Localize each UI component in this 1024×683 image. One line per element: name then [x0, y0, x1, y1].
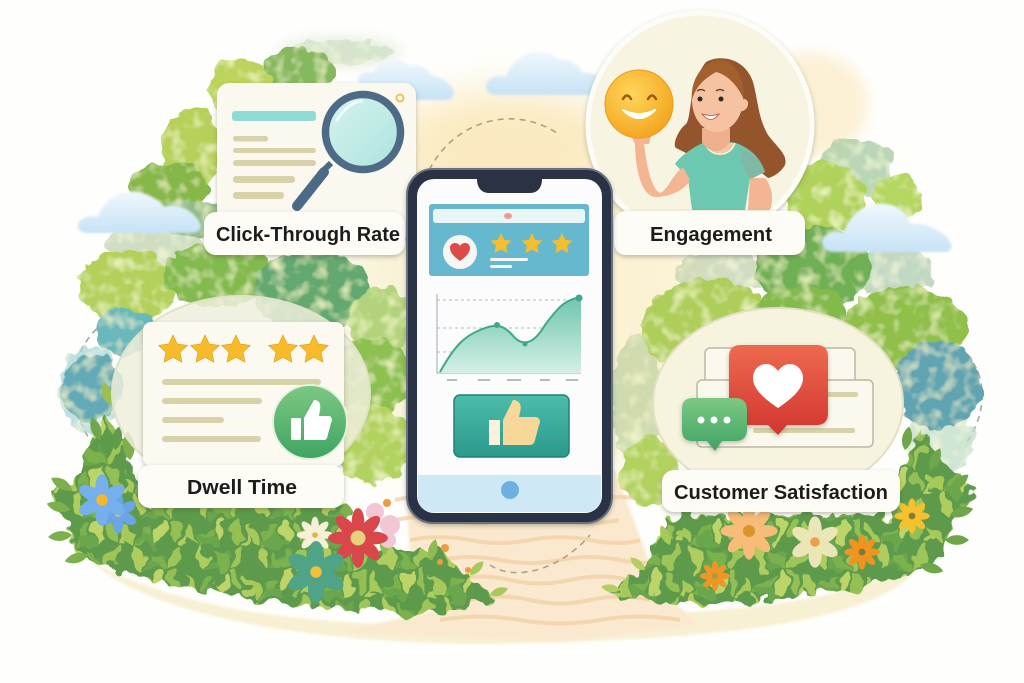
- sprigs: orange: [383, 499, 471, 573]
- foliage: pale background trees: [60, 40, 974, 474]
- bottom bar: [418, 475, 601, 512]
- area chart: [437, 294, 582, 380]
- flower: red: [328, 508, 388, 568]
- card lines: [753, 392, 858, 433]
- stacked cards: [697, 348, 873, 447]
- clouds: [78, 52, 952, 252]
- path with wavy stripes: [340, 470, 700, 642]
- label: engagement: Engagement: [650, 224, 772, 246]
- rating stars: [159, 335, 328, 362]
- bubble backdrop: [653, 308, 903, 498]
- foliage: right trees: [620, 162, 981, 506]
- card: search page: [217, 83, 416, 238]
- phone screen: [417, 179, 602, 513]
- flower: cream: [789, 516, 841, 568]
- label: click-through rate: Click-Through Rate: [216, 224, 400, 246]
- illustration: woman: [631, 58, 786, 210]
- panel: customer satisfaction: [653, 308, 903, 512]
- dashed orbit lines: [74, 119, 982, 573]
- foreground plants: right: [600, 426, 975, 606]
- review banner: [429, 204, 589, 276]
- flower: peach: [720, 502, 778, 560]
- foreground plants: left: [46, 381, 509, 616]
- thumbs up button: [454, 395, 569, 457]
- label: customer satisfaction: [662, 470, 900, 512]
- icon: magnifying glass: [297, 94, 404, 206]
- flowers: [76, 474, 930, 603]
- phone body: [407, 169, 612, 523]
- phone: [407, 169, 612, 523]
- flower: blue small: [98, 493, 138, 533]
- label: engagement: [614, 211, 805, 255]
- panel: dwell time: [112, 296, 370, 508]
- flower: orange: [844, 534, 880, 570]
- review lines: [162, 379, 321, 442]
- flower: pink: [366, 503, 400, 548]
- label: dwell time: [138, 465, 344, 508]
- panel: click-through rate: [204, 83, 416, 255]
- icon: chat bubble: [682, 398, 747, 451]
- bubble backdrop: [112, 296, 370, 490]
- foliage: left trees: [62, 48, 410, 485]
- flower: orange small: [700, 561, 730, 591]
- panel: engagement: [588, 13, 812, 255]
- flower: white: [297, 517, 333, 553]
- notch: [477, 179, 542, 193]
- flower: yellow: [894, 498, 930, 534]
- icon: smiley: [605, 70, 673, 138]
- circle backdrop: [588, 13, 812, 237]
- label: customer satisfaction: Customer Satisfaction: [674, 482, 888, 504]
- icon: heart speech bubble: [729, 345, 828, 435]
- label: dwell time: Dwell Time: [187, 477, 297, 499]
- card: review: [143, 322, 344, 466]
- label: click-through rate: [204, 212, 405, 255]
- search result lines: [232, 111, 316, 199]
- flower: teal: [285, 541, 347, 603]
- flower: blue: [76, 474, 128, 526]
- icon: thumbs up badge: [273, 385, 347, 459]
